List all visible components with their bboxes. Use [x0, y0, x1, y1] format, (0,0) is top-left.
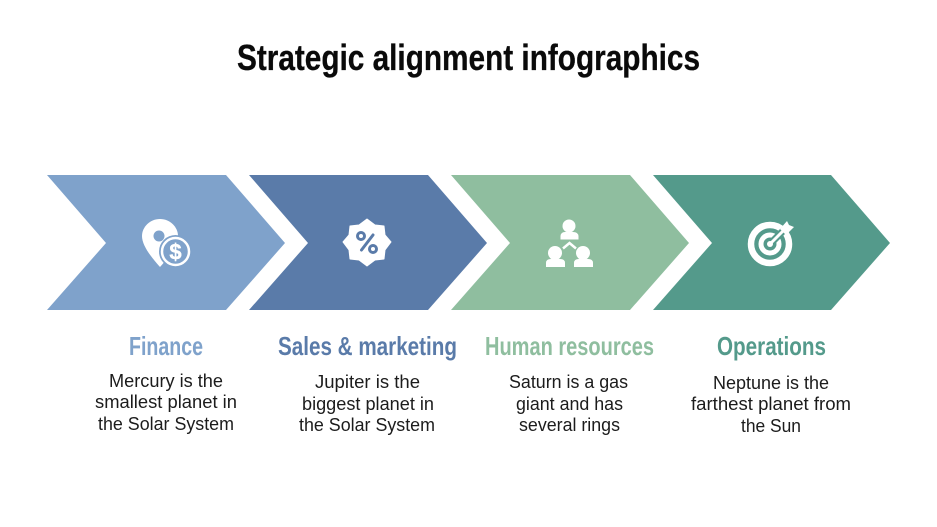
- text: operations description: the Sun: [741, 416, 801, 436]
- heading: human resources: Human resources: [485, 331, 654, 361]
- text: operations description: farthest planet from: [691, 394, 851, 414]
- chevron: operations: [653, 175, 890, 310]
- text: finance description: smallest planet in: [95, 392, 237, 412]
- text: human resources description: [509, 372, 628, 435]
- text: operations description: [691, 373, 851, 436]
- icon: team of three people: [546, 220, 593, 267]
- icon: target with arrow: [751, 221, 794, 263]
- chevron: sales and marketing: [249, 175, 487, 310]
- icon: map pin with dollar coin: [142, 219, 192, 268]
- heading: operations: Operations: [717, 331, 826, 361]
- heading: finance: Finance: [129, 331, 203, 361]
- text: sales and marketing description: biggest planet in: [302, 394, 434, 414]
- text: finance description: the Solar System: [98, 414, 234, 434]
- text: sales and marketing description: the Solar System: [299, 415, 435, 435]
- text: sales and marketing description: Jupiter is the: [315, 372, 420, 392]
- chevron: finance: [47, 175, 285, 310]
- text: operations description: Neptune is the: [713, 373, 829, 393]
- text: sales and marketing description: [299, 372, 435, 435]
- title: Strategic alignment infographics: [237, 37, 700, 78]
- chevron: human resources: [451, 175, 689, 310]
- text: finance description: Mercury is the: [109, 371, 223, 391]
- icon: map pin with dollar coin: $: [169, 240, 182, 264]
- heading: sales and marketing: Sales & marketing: [278, 331, 457, 361]
- text: human resources description: giant and has: [516, 394, 623, 414]
- text: finance description: [95, 371, 237, 434]
- text: human resources description: Saturn is a gas: [509, 372, 628, 392]
- icon: percent badge: [343, 219, 391, 266]
- text: human resources description: several rings: [519, 415, 620, 435]
